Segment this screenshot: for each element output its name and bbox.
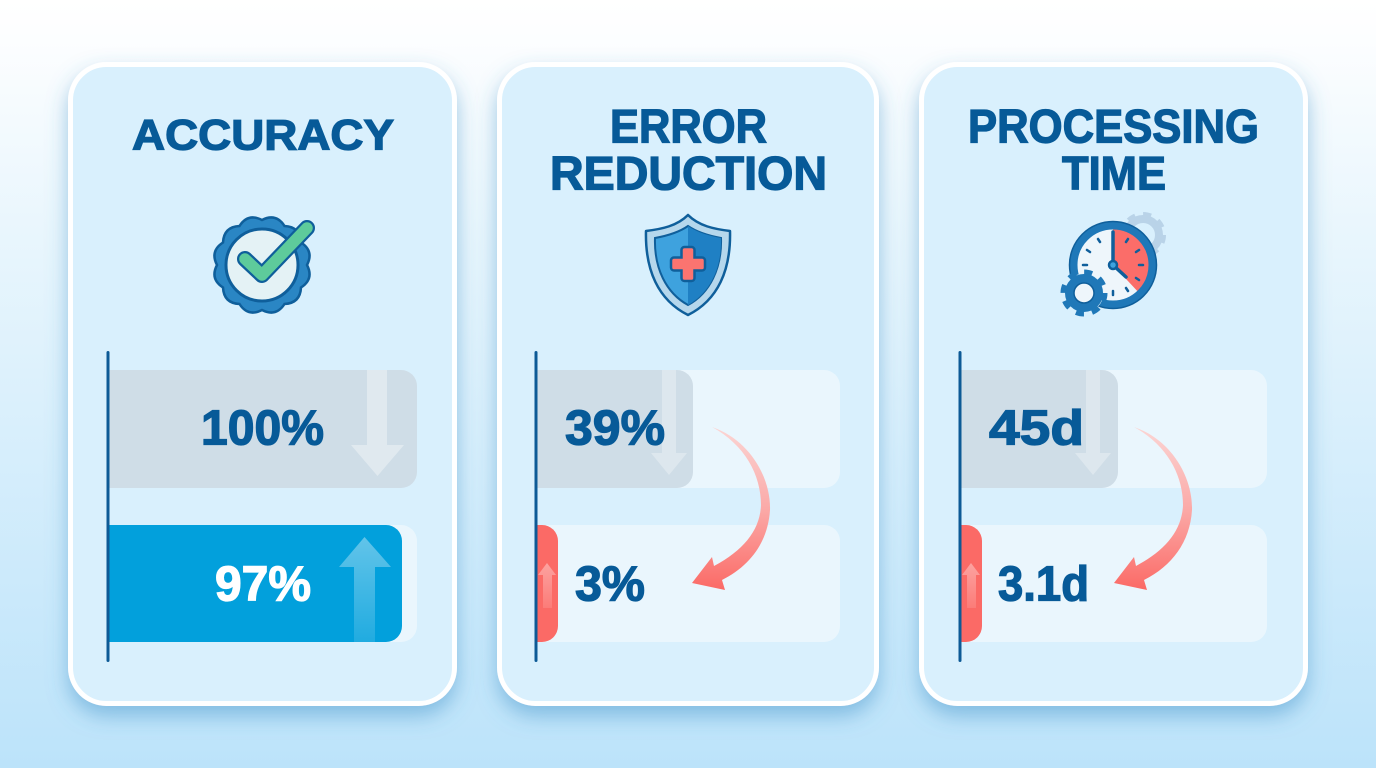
heading: processing time: PROCESSING <box>968 100 1259 152</box>
panel: accuracy <box>70 64 454 704</box>
heading: error reduction: ERROR <box>610 100 767 152</box>
value: 100%: 100% <box>201 402 324 456</box>
panel: processing time <box>922 64 1306 704</box>
value: 39%: 39% <box>565 402 665 456</box>
axis line <box>958 351 962 662</box>
bar: errors before 39% <box>536 370 840 488</box>
heading: processing time: TIME <box>1062 146 1166 200</box>
value: 97%: 97% <box>215 558 311 612</box>
heading: error reduction <box>550 100 827 200</box>
heading: accuracy: ACCURACY <box>132 112 394 160</box>
axis line <box>534 351 538 662</box>
icon: badge with check mark <box>214 217 310 313</box>
axis line <box>106 351 110 662</box>
bar: time after 3.1d <box>960 525 1267 642</box>
bar: time before 45d <box>960 370 1267 488</box>
value: 3%: 3% <box>575 558 645 612</box>
icon: shield with cross <box>646 215 730 315</box>
heading: error reduction: REDUCTION <box>550 146 827 200</box>
heading: processing time <box>968 100 1259 200</box>
value: 45d: 45d <box>989 402 1084 456</box>
arrow: curved decrease <box>1114 427 1192 590</box>
bar: accuracy before 100% <box>108 370 417 488</box>
value: 3.1d: 3.1d <box>998 558 1089 612</box>
bar: accuracy after 97% <box>108 525 417 642</box>
arrow: curved decrease <box>692 427 770 590</box>
icon: stopwatch with gears <box>1064 215 1163 314</box>
panel: error reduction <box>500 64 876 704</box>
bar: errors after 3% <box>536 525 840 642</box>
